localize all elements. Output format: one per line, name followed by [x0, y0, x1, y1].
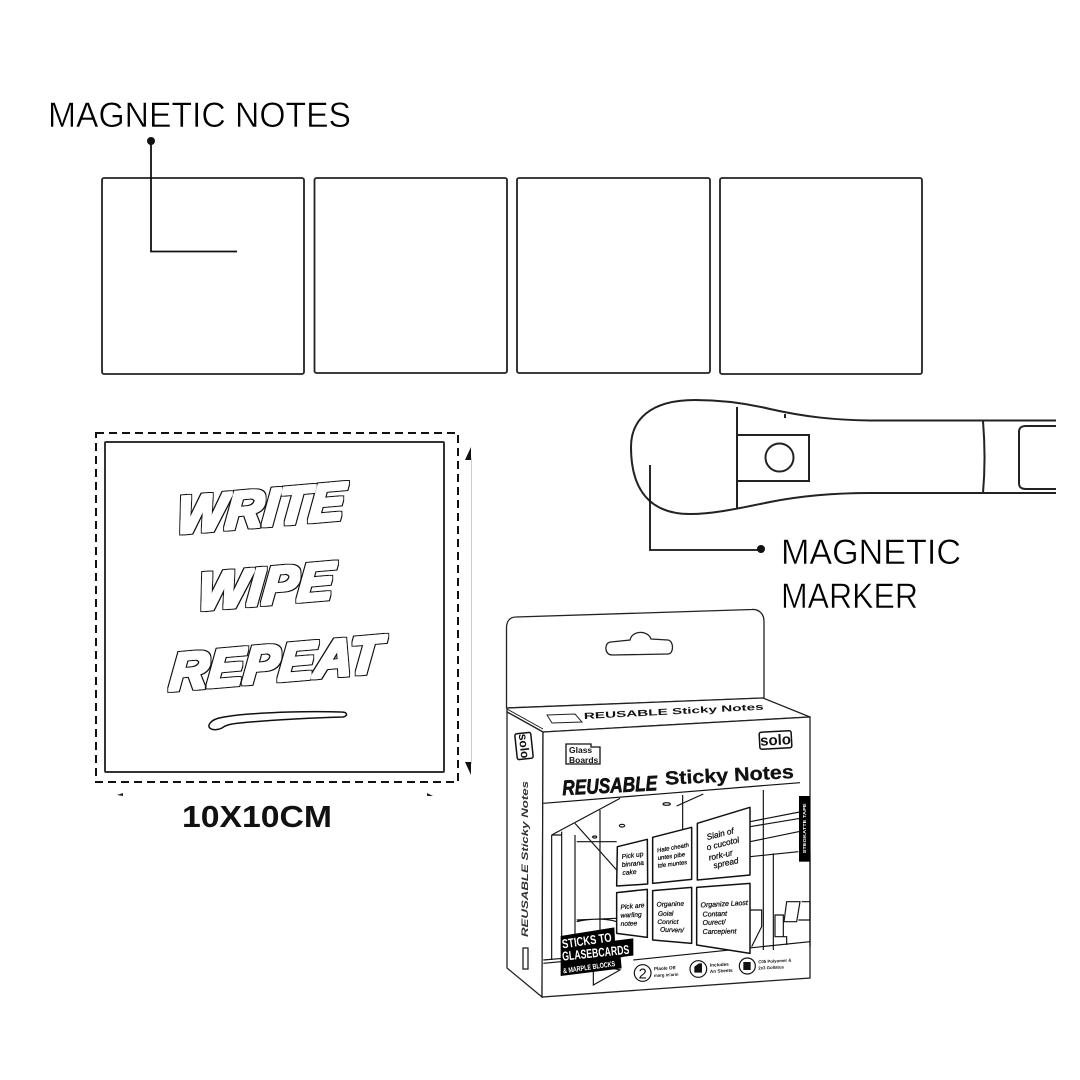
note card handwriting: Ourect/	[702, 919, 727, 927]
hanger hole	[606, 632, 672, 655]
callout: sticks to glassboards: GLASEBCARDS	[562, 943, 630, 964]
label: magnetic marker: MARKER	[781, 577, 918, 616]
heading: magnetic notes: MAGNETIC NOTES	[48, 96, 351, 135]
note card handwriting	[620, 825, 749, 936]
panel: row of four magnetic notes	[102, 178, 922, 374]
note card handwriting: Hate cheath	[657, 843, 690, 854]
box top face label	[547, 702, 765, 723]
arrow: vertical dimension	[465, 447, 472, 775]
note card handwriting: Pick are	[620, 902, 645, 911]
note card handwriting: o cucotol	[705, 834, 741, 852]
note text: write wipe repeat: WIPE	[196, 552, 338, 622]
box top face	[507, 698, 810, 732]
callout: sticks to glassboards: & MARPLE BLOCKS	[562, 959, 616, 975]
box illustration: office with notes on glass	[543, 783, 810, 985]
note outline	[105, 442, 444, 772]
box title	[562, 762, 795, 800]
feature icons and captions: An Sheets	[710, 968, 733, 974]
arrow: magnetic notes leader line	[147, 137, 237, 252]
note card handwriting: Carcepient	[703, 928, 738, 936]
note card handwriting: Pick up	[621, 851, 644, 861]
arrow: magnetic marker leader line	[650, 465, 765, 553]
callout: sticks to glassboards	[561, 927, 633, 976]
note card handwriting: Goial	[658, 910, 674, 918]
note card handwriting: Organine	[656, 901, 684, 909]
side logo: solo: solo	[516, 733, 532, 759]
logo: glass boards: Boards	[569, 755, 599, 765]
note card handwriting: tde muntes	[658, 860, 688, 870]
box hanger tab	[506, 609, 764, 708]
callout: sticks to glassboards: STICKS TO	[561, 930, 613, 951]
logo: glass boards: Glass	[569, 745, 592, 755]
icon: magnetic marker	[631, 400, 1056, 514]
label: magnetic marker	[781, 533, 961, 616]
feature icons and captions: 2	[639, 967, 647, 983]
note card handwriting: notee	[620, 920, 638, 928]
box top face label: REUSABLE Sticky Notes	[584, 702, 765, 722]
note card handwriting: Organize Laost	[700, 900, 749, 909]
logo: glass boards	[566, 744, 600, 765]
note card handwriting: cake	[622, 869, 637, 877]
black side tab	[799, 796, 810, 862]
feature icons and captions: Includes	[710, 962, 729, 968]
feature icons and captions: 2x3 Gollatus	[758, 964, 785, 971]
logo: solo: solo	[760, 731, 791, 750]
note card handwriting: untes pibe	[657, 852, 686, 862]
note card handwriting: Conrict	[657, 919, 680, 926]
feature icons and captions	[634, 958, 792, 983]
feature icons and captions: Plaole Off	[654, 965, 676, 971]
note card handwriting: warling	[620, 912, 642, 920]
box side face	[507, 712, 543, 997]
note card handwriting: Contant	[702, 911, 728, 919]
note card handwriting: Ourven/	[660, 927, 685, 935]
side small rectangle	[523, 948, 528, 969]
black side tab: STEGKATTE TAPE	[802, 803, 807, 853]
note text: write wipe repeat	[168, 473, 388, 703]
box title: Sticky Notes	[664, 762, 794, 790]
note card handwriting: spread	[712, 855, 740, 870]
note cards on glass	[617, 807, 750, 953]
panel: product box	[506, 609, 810, 997]
note text: write wipe repeat: REPEAT	[168, 625, 388, 703]
side label: reusable sticky notes: REUSABLE Sticky Notes	[520, 781, 530, 937]
note card handwriting: Slain of	[705, 825, 736, 842]
arrow: horizontal dimension ticks	[117, 793, 433, 796]
panel: single note with dashed size frame	[96, 433, 458, 782]
label: magnetic marker: MAGNETIC	[781, 533, 961, 572]
note card handwriting: binrana	[621, 860, 645, 869]
note underline stroke	[209, 712, 347, 730]
box title: REUSABLE	[562, 772, 659, 800]
dashed size frame	[96, 433, 458, 782]
note text: write wipe repeat: WRITE	[175, 473, 349, 546]
feature icons and captions: C05 Polyomer &	[758, 958, 792, 964]
office architecture lines	[543, 783, 810, 985]
box front face	[542, 717, 810, 997]
note card handwriting: rork-ur	[708, 847, 735, 863]
feature icons and captions: marg in'arin	[654, 972, 679, 978]
label: note size: 10X10CM	[182, 799, 332, 834]
